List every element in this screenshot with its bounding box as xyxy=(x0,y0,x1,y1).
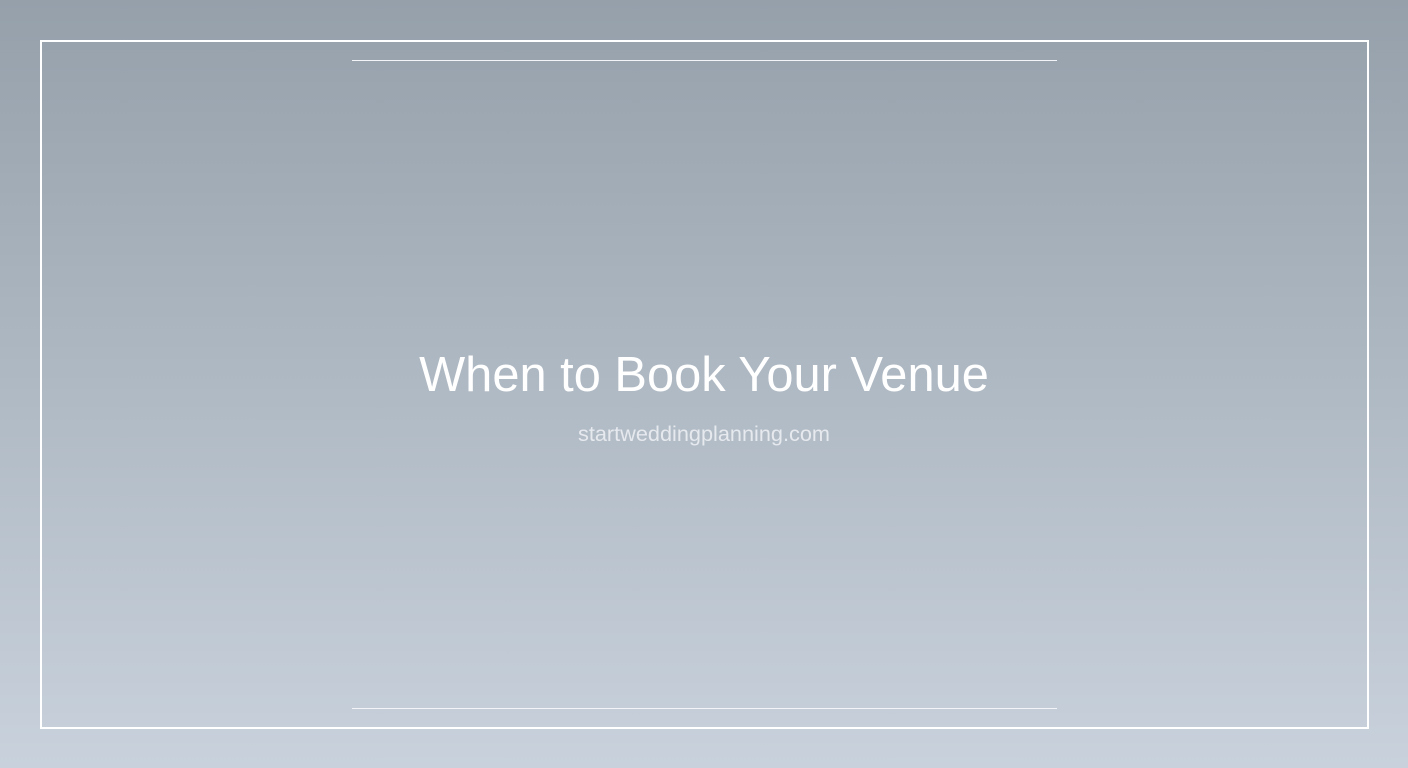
subtitle: website: startweddingplanning.com xyxy=(578,421,830,446)
top rule xyxy=(352,60,1057,61)
title: When to Book Your Venue xyxy=(419,348,989,402)
bottom rule xyxy=(352,708,1057,709)
